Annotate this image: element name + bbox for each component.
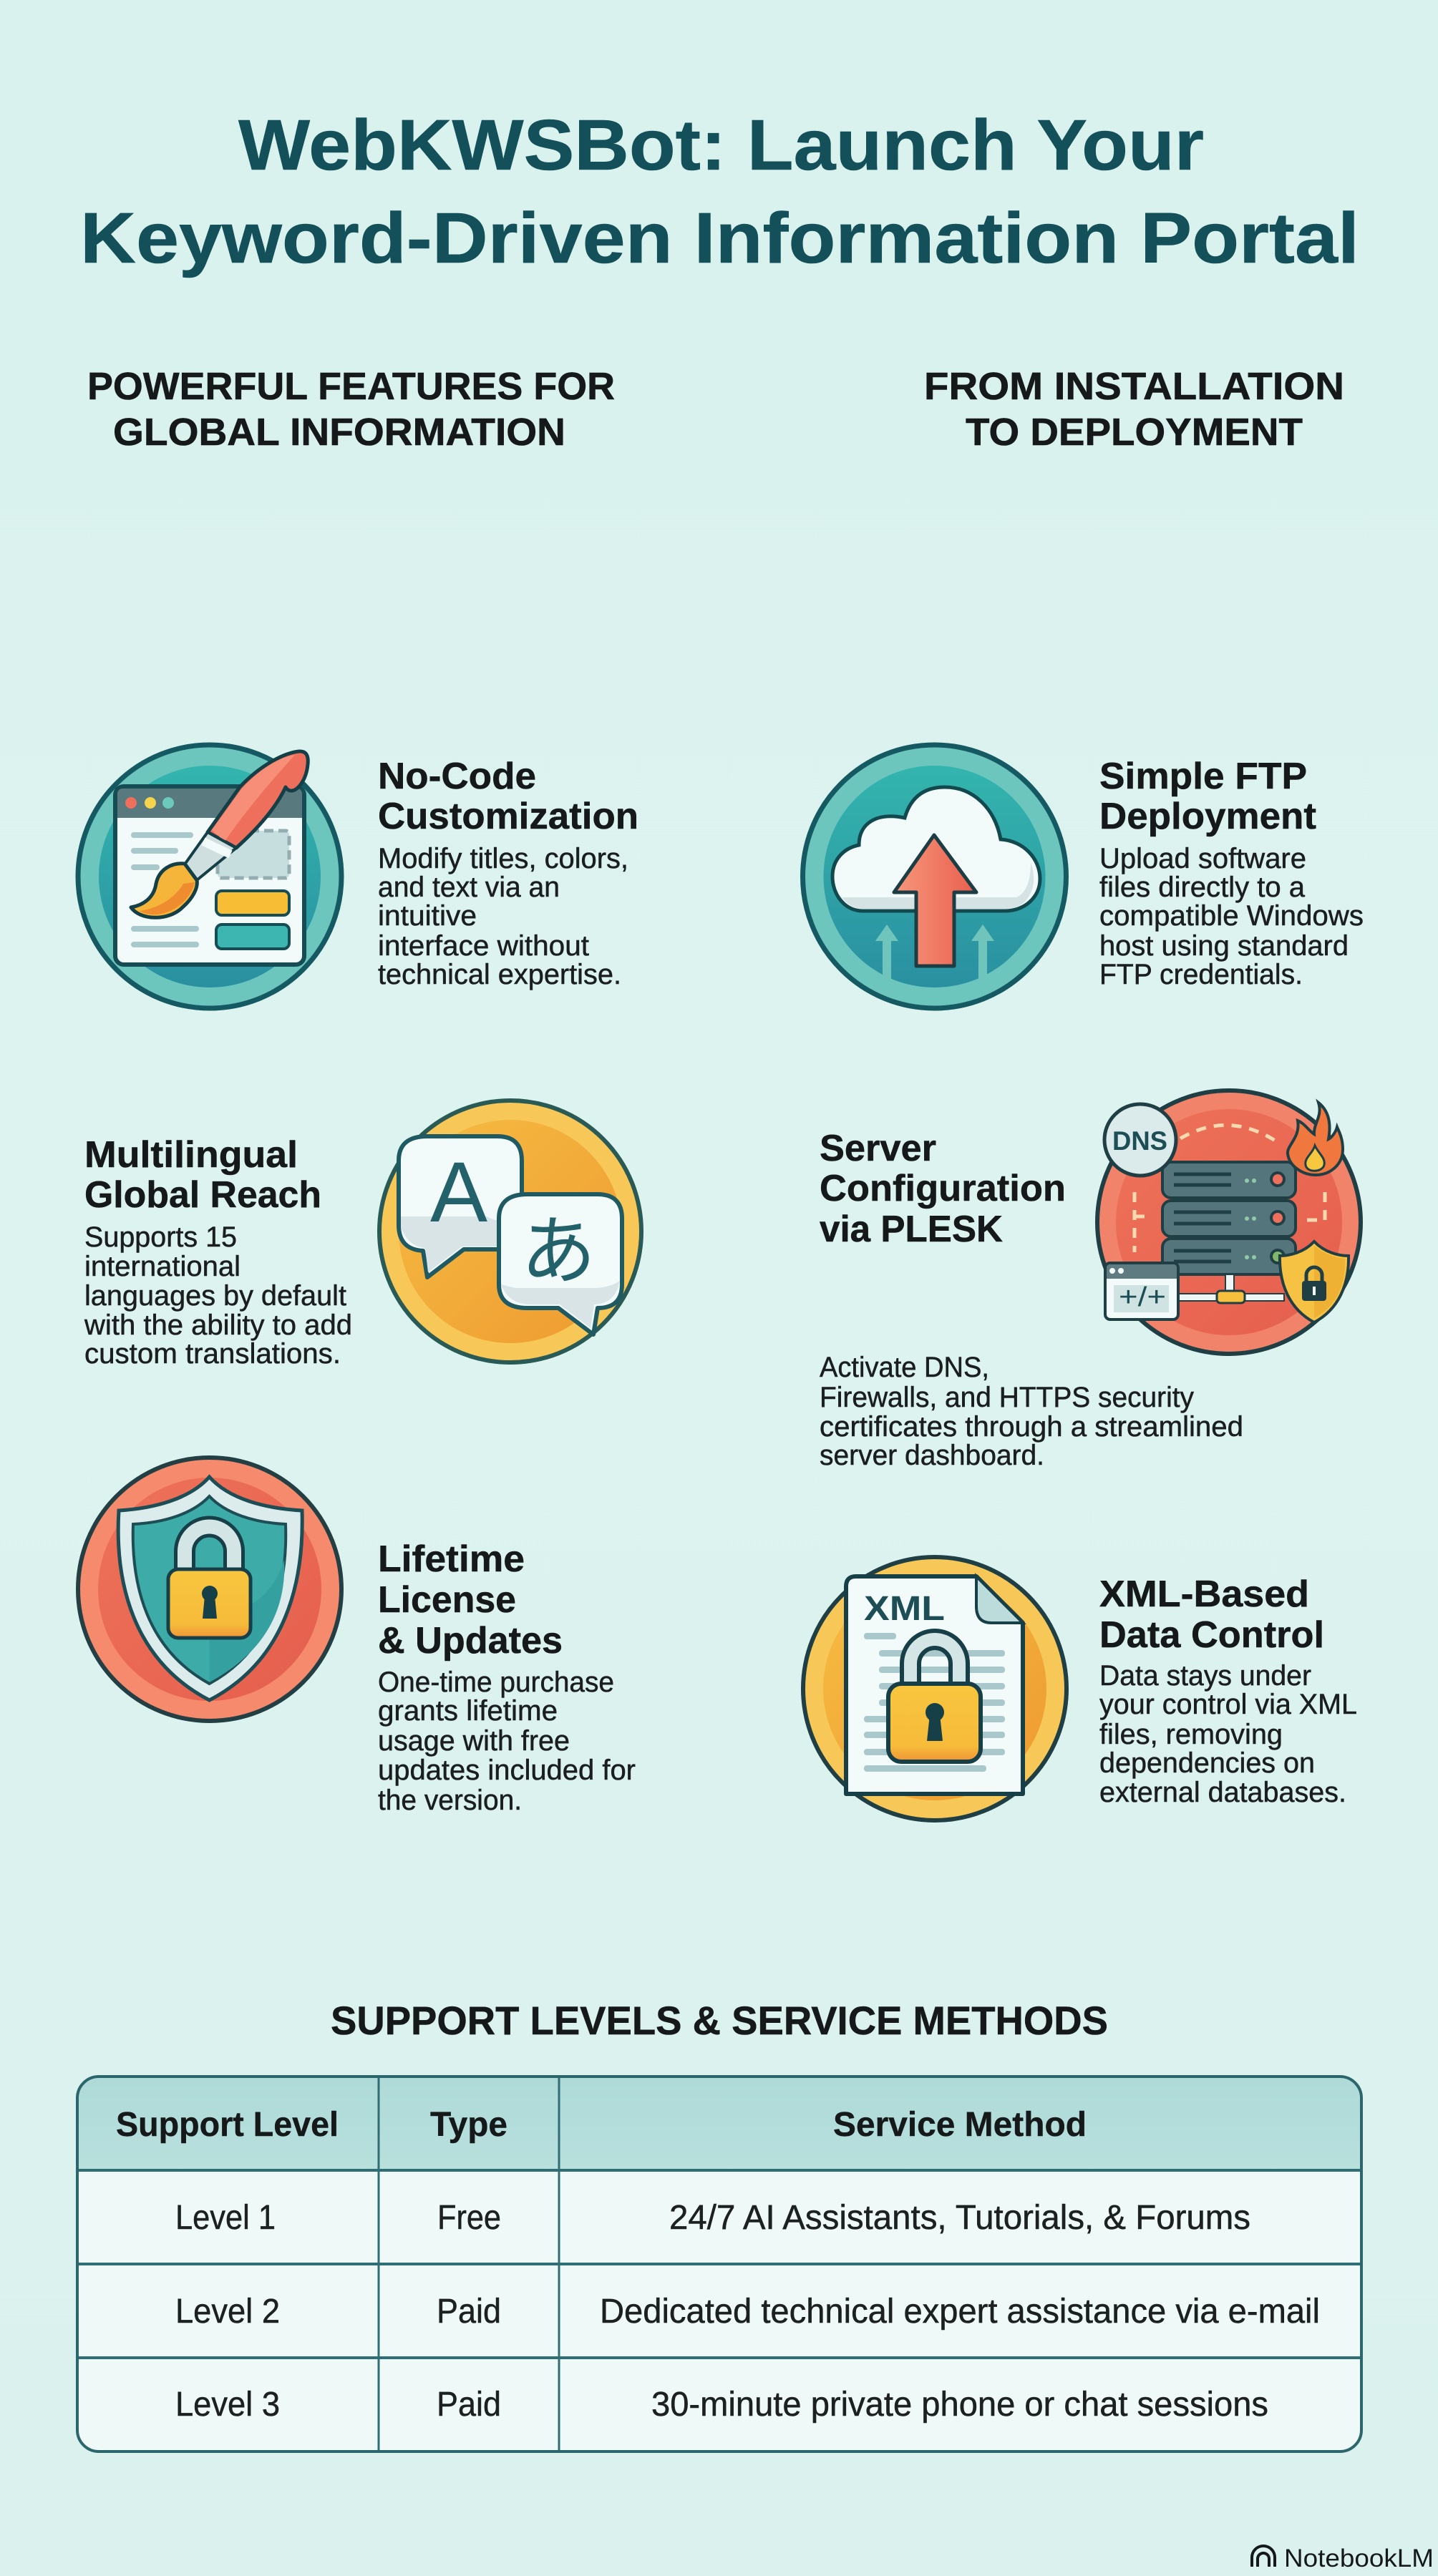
panel: server configuration via plesk [820, 1091, 1361, 1471]
table row: level 2: Level 2 [175, 2293, 280, 2331]
heading: lifetime license and updates: License [378, 1579, 516, 1621]
text: lifetime description: grants lifetime [378, 1695, 558, 1727]
title: WebKWSBot: Launch Your [238, 105, 1204, 185]
table row: level 3: 30-minute private phone or chat sessions [651, 2386, 1268, 2424]
text: server description: Firewalls, and HTTPS security [820, 1382, 1194, 1413]
icon: browser and paintbrush [78, 745, 341, 1008]
table header row: Type [430, 2106, 507, 2144]
icon: server stack with dns, firewall and shield: DNS [1112, 1126, 1167, 1156]
text: server description [820, 1352, 1243, 1471]
icon: cloud upload [803, 745, 1067, 1008]
text: server description: server dashboard. [820, 1440, 1044, 1471]
text: no-code description: Modify titles, colors, [378, 843, 628, 874]
text: no-code description: intuitive [378, 900, 477, 932]
heading: server configuration: via PLESK [820, 1209, 1003, 1250]
heading: xml-based data control: XML-Based [1099, 1574, 1309, 1615]
panel: lifetime license and updates [78, 1458, 636, 1816]
table row: level 1 [175, 2199, 1250, 2237]
icon: language speech bubbles: あ [520, 1210, 596, 1294]
table header row: Service Method [833, 2106, 1087, 2144]
heading: xml-based data control: Data Control [1099, 1614, 1324, 1656]
heading: xml-based data control [1099, 1574, 1324, 1656]
text: ftp description: files directly to a [1099, 872, 1306, 903]
text: no-code description: interface without [378, 930, 589, 962]
heading: server configuration [820, 1128, 1066, 1250]
heading: multilingual global reach [84, 1134, 321, 1216]
text: lifetime description: usage with free [378, 1725, 570, 1757]
heading: powerful features: POWERFUL FEATURES FOR [87, 365, 615, 408]
icon: xml document with padlock: XML [864, 1590, 945, 1628]
title: Keyword-Driven Information Portal [80, 198, 1359, 278]
icon: server stack with dns, firewall and shield: +/+ [1119, 1282, 1166, 1312]
icon: language speech bubbles: A [430, 1144, 487, 1240]
panel: simple ftp deployment [803, 745, 1364, 1008]
heading: installation to deployment: FROM INSTALLATION [924, 365, 1344, 408]
table header row [116, 2106, 1087, 2144]
text: xml description: external databases. [1099, 1777, 1346, 1808]
text: multilingual description: languages by default [84, 1280, 346, 1312]
text: xml description: dependencies on [1099, 1747, 1315, 1779]
panel: multilingual global reach [84, 1101, 641, 1370]
text: xml description [1099, 1660, 1357, 1808]
text: no-code description [378, 843, 628, 990]
table header row: Support Level [116, 2106, 339, 2144]
text: lifetime description: One-time purchase [378, 1667, 614, 1698]
heading: installation to deployment: TO DEPLOYMENT [966, 411, 1303, 454]
text: server description: Activate DNS, [820, 1352, 989, 1383]
icon: server stack with dns, firewall and shield [1097, 1091, 1361, 1354]
text: xml description: files, removing [1099, 1719, 1283, 1750]
heading: support levels: SUPPORT LEVELS & SERVICE METHODS [331, 1998, 1108, 2043]
text: multilingual description: custom translations. [84, 1338, 341, 1370]
table row: level 3: Level 3 [175, 2386, 280, 2424]
icon: xml document with padlock [803, 1557, 1067, 1820]
table row: level 3: Paid [437, 2386, 501, 2424]
table row: level 1: Free [437, 2199, 501, 2237]
table row: level 1: Level 1 [175, 2199, 276, 2237]
text: multilingual description: Supports 15 [84, 1221, 237, 1253]
text: xml description: your control via XML [1099, 1689, 1357, 1720]
heading: powerful features: GLOBAL INFORMATION [113, 411, 565, 454]
title [80, 105, 1359, 278]
text: server description: certificates through a streamlined [820, 1411, 1243, 1443]
heading: no-code customization: Customization [378, 796, 638, 837]
text: no-code description: technical expertise. [378, 959, 621, 990]
heading: simple ftp deployment: Deployment [1099, 796, 1316, 837]
text: multilingual description: with the ability to add [84, 1309, 352, 1341]
heading: no-code customization [378, 756, 638, 837]
text: no-code description: and text via an [378, 872, 560, 903]
text: ftp description [1099, 843, 1364, 990]
heading: simple ftp deployment: Simple FTP [1099, 756, 1307, 797]
text: ftp description: FTP credentials. [1099, 959, 1303, 990]
heading: installation to deployment [924, 365, 1344, 454]
heading: no-code customization: No-Code [378, 756, 536, 797]
table row: level 2: Paid [437, 2293, 501, 2331]
text: ftp description: host using standard [1099, 930, 1349, 962]
heading: lifetime license and updates [378, 1538, 563, 1662]
table: support levels and service methods [77, 2077, 1361, 2451]
text: lifetime description: updates included for [378, 1755, 636, 1786]
text: multilingual description: international [84, 1251, 241, 1282]
heading: simple ftp deployment [1099, 756, 1316, 837]
table row: level 2: Dedicated technical expert assistance via e-mail [600, 2293, 1320, 2331]
heading: multilingual global reach: Global Reach [84, 1174, 321, 1216]
text: ftp description: compatible Windows [1099, 900, 1364, 932]
icon: language speech bubbles [379, 1101, 641, 1362]
text: ftp description: Upload software [1099, 843, 1306, 874]
table row: level 3 [175, 2386, 1268, 2424]
panel: no-code customization [78, 745, 638, 1008]
text: lifetime description: the version. [378, 1785, 522, 1816]
panel: xml-based data control [803, 1557, 1357, 1820]
heading: lifetime license and updates: Lifetime [378, 1538, 525, 1580]
icon: shield with padlock [78, 1458, 341, 1721]
logo: NotebookLM: NotebookLM [1284, 2545, 1434, 2572]
text: lifetime description [378, 1667, 636, 1816]
heading: powerful features [87, 365, 615, 454]
text: multilingual description [84, 1221, 352, 1370]
table row: level 1: 24/7 AI Assistants, Tutorials, & Forums [669, 2199, 1250, 2237]
heading: lifetime license and updates: & Updates [378, 1620, 563, 1662]
heading: server configuration: Configuration [820, 1168, 1066, 1209]
table row: level 2 [175, 2293, 1320, 2331]
heading: server configuration: Server [820, 1128, 936, 1169]
text: xml description: Data stays under [1099, 1660, 1311, 1692]
heading: multilingual global reach: Multilingual [84, 1134, 298, 1176]
